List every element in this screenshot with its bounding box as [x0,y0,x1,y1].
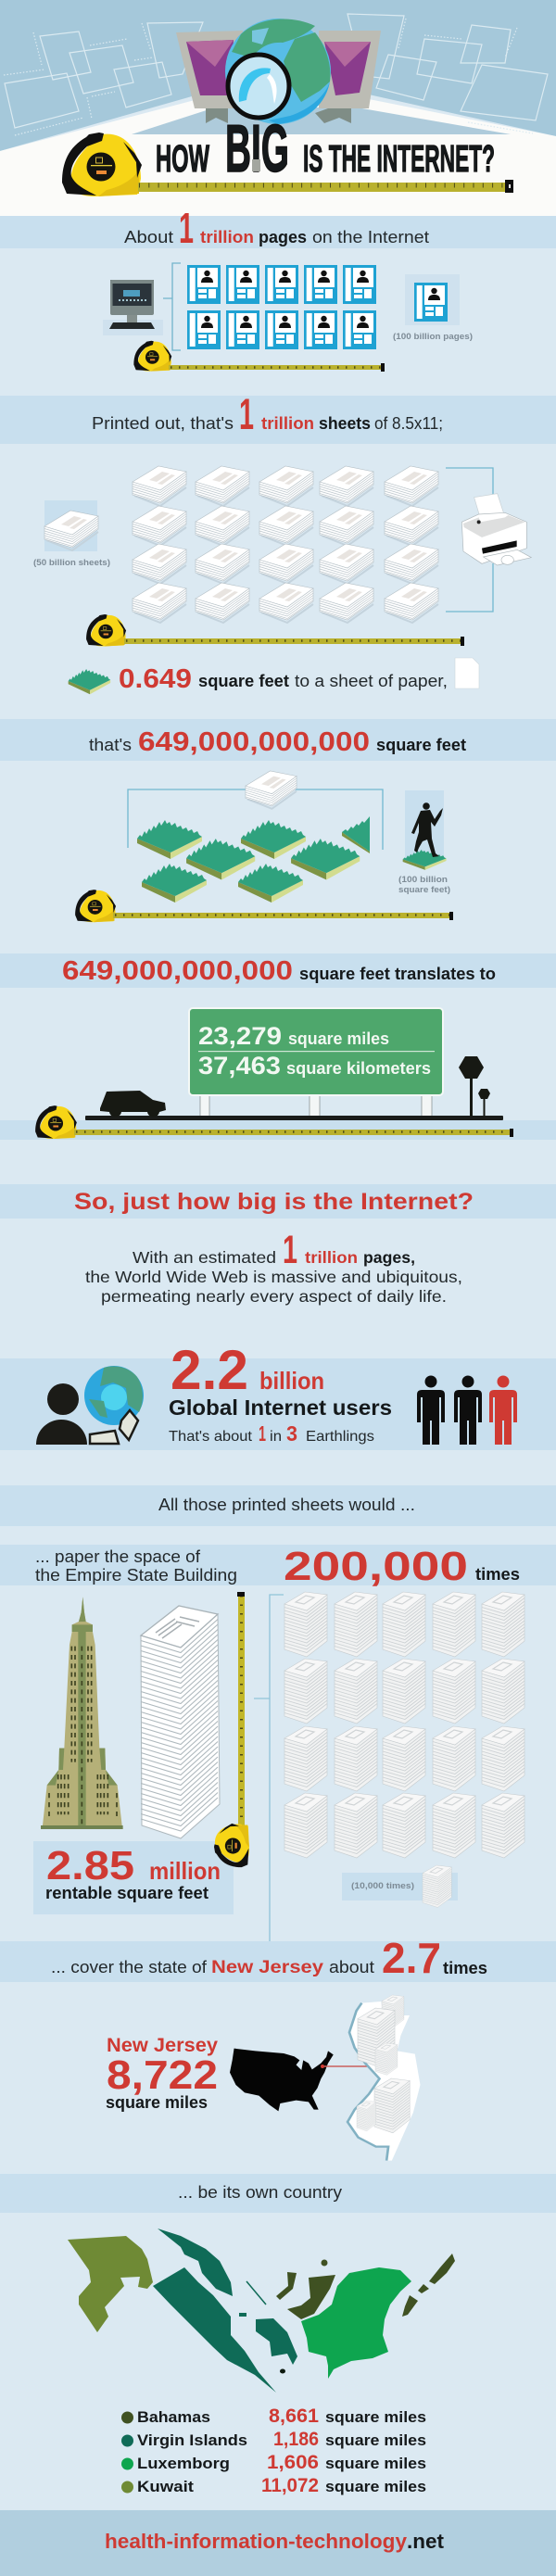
legend: country areas: 8,661 [269,2406,319,2427]
footer [0,2510,556,2576]
icon: globe [225,19,331,124]
band [0,1358,556,1450]
legend: 100 billion pages [393,274,473,342]
title [156,112,495,186]
bracket [254,1595,284,1944]
legend: 100 billion square feet: (100 billion [398,875,448,885]
statistic: 2.2 billion: billion [259,1367,324,1395]
heading: 649,000,000,000 [138,727,370,757]
heading: sheets [319,414,371,433]
icon: magnifying glass [228,55,289,118]
heading: trillion [261,414,314,433]
legend: country areas: 11,072 [261,2475,319,2496]
band [0,1941,556,1982]
legend: country areas: Kuwait [137,2478,194,2495]
tape measure [35,1105,513,1139]
icon: empire state building [41,1597,123,1829]
panel: 1 trillion sheets [0,389,556,694]
statistic: 2.2 billion: That's about [169,1429,253,1445]
band [0,396,556,444]
heading [92,389,443,438]
statistic: 2.85 million: rentable square feet [45,1884,208,1902]
legend: 100 billion square feet [398,790,450,895]
legend: 100 billion pages: (100 billion pages) [393,332,473,342]
header inner floor [132,107,511,134]
tape measure: vertical [214,1592,249,1867]
icon: walking man [411,802,443,857]
heading: times [443,1959,487,1977]
heading: So, just how big is the Internet? [74,1189,474,1215]
icon: grass tile [69,669,110,694]
monitor right [315,31,381,123]
legend: country areas: 1,606 [267,2452,319,2473]
statistic: 2.85 million: million [149,1857,221,1885]
paragraph: trillion [305,1248,358,1267]
paragraph: 1 [283,1228,297,1272]
tall stacks grid [284,1592,524,1858]
paragraph [85,1228,462,1306]
statistic: 2.2 billion: 2.2 [171,1339,248,1401]
panel: translates to miles and kilometers [0,953,556,1140]
panel: global internet users [0,1339,556,1450]
highway sign: square kilometers [286,1059,431,1078]
heading: square feet [376,736,466,754]
heading: that's [89,736,132,754]
heading: About [124,228,173,246]
heading [51,1934,487,1982]
icon: sheet of paper [455,658,479,688]
band [0,1485,556,1526]
heading: All those printed sheets would ... [158,1496,415,1514]
legend: country areas: square miles [325,2408,426,2426]
legend: country areas: square miles [325,2455,426,2472]
map: kuwait shape [68,2236,153,2332]
band [0,953,556,988]
statistic: 2.2 billion: Earthlings [306,1429,374,1445]
statistic: 200,000 times: 200,000 [284,1544,468,1589]
icon: three people [417,1375,517,1445]
band [0,2174,556,2213]
paper stacks grid [133,466,438,623]
icon: tall paper stack [141,1606,220,1838]
heading text [35,1547,237,1585]
panel: all those printed sheets [0,1485,556,1526]
icon: printer [461,494,531,565]
legend: 10,000 times: (10,000 times) [351,1881,414,1891]
footer: .net [407,2530,445,2553]
panel: so how big [0,1184,556,1306]
tape measure [86,614,464,647]
heading: 1 [179,204,194,252]
paragraph: pages, [363,1248,415,1267]
statement: square feet per sheet [69,658,479,694]
legend: country areas: 1,186 [273,2429,319,2450]
legend: 50 billion sheets [33,500,110,568]
icon: road signs [459,1056,490,1117]
tape measure [133,341,385,372]
band [0,1545,556,1585]
bracket [163,263,181,350]
statistic: 2.2 billion: 3 [286,1421,297,1446]
sign posts [200,1095,432,1117]
heading: trillion [200,228,254,246]
heading: 1 [239,389,254,438]
heading: ... be its own country [178,2183,342,2202]
tape measure: header [62,133,513,196]
statistic: new jersey area: 8,722 [107,2052,218,2098]
icon: car [100,1091,166,1117]
statistic: 2.2 billion: Global Internet users [169,1395,392,1420]
footer: health-information-technology [105,2530,408,2553]
heading [62,956,496,986]
title: HOW [156,137,209,180]
legend: 10,000 times [342,1865,458,1907]
header white roof and ground [0,99,556,216]
statistic: new jersey area: New Jersey [107,2035,218,2056]
panel: be its own country [0,2174,556,2496]
page icons grid [187,265,376,349]
heading [124,204,429,252]
map: bahamas shape [276,2254,455,2374]
band [0,719,556,761]
heading: New Jersey [211,1958,323,1977]
blueprint sheet outlines [4,14,548,135]
heading: pages [259,228,307,246]
statistic: 2.2 billion: in [270,1429,282,1445]
bracket [446,468,493,612]
statistic: 2.85 million [33,1841,234,1914]
statement: square feet per sheet: to a sheet of paper, [295,672,448,690]
heading text: ... paper the space of [35,1547,201,1566]
header sky [0,0,556,151]
heading: square feet translates to [299,965,496,983]
band [0,1184,556,1219]
highway sign: square miles [288,1029,389,1048]
road [85,1116,503,1120]
band [0,216,556,248]
statistic: new jersey area: square miles [106,2093,208,2112]
map: virgin islands shape [153,2229,297,2393]
statistic: new jersey area [106,2035,218,2112]
icon: desktop computer [103,280,163,335]
highway sign [189,1008,443,1095]
legend: 50 billion sheets: (50 billion sheets) [33,558,110,568]
statistic: 2.2 billion [169,1339,392,1446]
icon: person with globe [36,1366,144,1445]
highway sign: 23,279 [198,1022,282,1050]
paragraph: permeating nearly every aspect of daily life. [101,1287,447,1306]
panel: empire state building [0,1544,556,1944]
monitor left [176,31,243,123]
legend: country areas: Virgin Islands [137,2431,247,2449]
highway sign: 37,463 [198,1052,281,1080]
legend: 100 billion square feet: square feet) [398,885,450,895]
statistic: 2.2 billion: 1 [259,1421,266,1446]
legend: country areas [121,2406,426,2496]
heading: on the Internet [312,228,429,246]
title: BIG [225,112,289,186]
panel: 1 trillion pages [0,204,556,372]
statistic: 2.85 million: 2.85 [46,1843,134,1888]
legend: country areas: square miles [325,2478,426,2495]
panel: header [0,0,556,216]
panel: new jersey [0,1934,556,2161]
heading: 2.7 [382,1934,441,1982]
heading: 649,000,000,000 [62,956,293,986]
heading: about [329,1958,374,1976]
road band [0,1120,556,1140]
heading: ... cover the state of [51,1958,208,1976]
statement: square feet per sheet: 0.649 [119,664,192,694]
map: new jersey with stacks [348,1995,420,2161]
heading [89,727,466,757]
heading: of 8.5x11; [374,414,443,433]
icon: paper stack [246,771,297,809]
legend: country areas: Bahamas [137,2408,210,2426]
map: luxembourg shape [301,2267,411,2379]
heading: Printed out, that's [92,414,234,433]
connector line [322,2065,367,2067]
paragraph: With an estimated [133,1248,276,1267]
tape measure [75,890,453,922]
statistic: 200,000 times [284,1544,520,1589]
heading text: the Empire State Building [35,1566,237,1585]
statement: square feet per sheet: square feet [198,672,289,690]
paragraph: the World Wide Web is massive and ubiquitous, [85,1268,462,1286]
panel: 649 billion square feet [0,719,556,922]
bracket [128,789,383,850]
legend: country areas: Luxemborg [137,2455,230,2472]
grass tiles [137,816,370,903]
legend: country areas: square miles [325,2431,426,2449]
statistic: 200,000 times: times [475,1565,520,1584]
map: united states [230,2049,334,2111]
